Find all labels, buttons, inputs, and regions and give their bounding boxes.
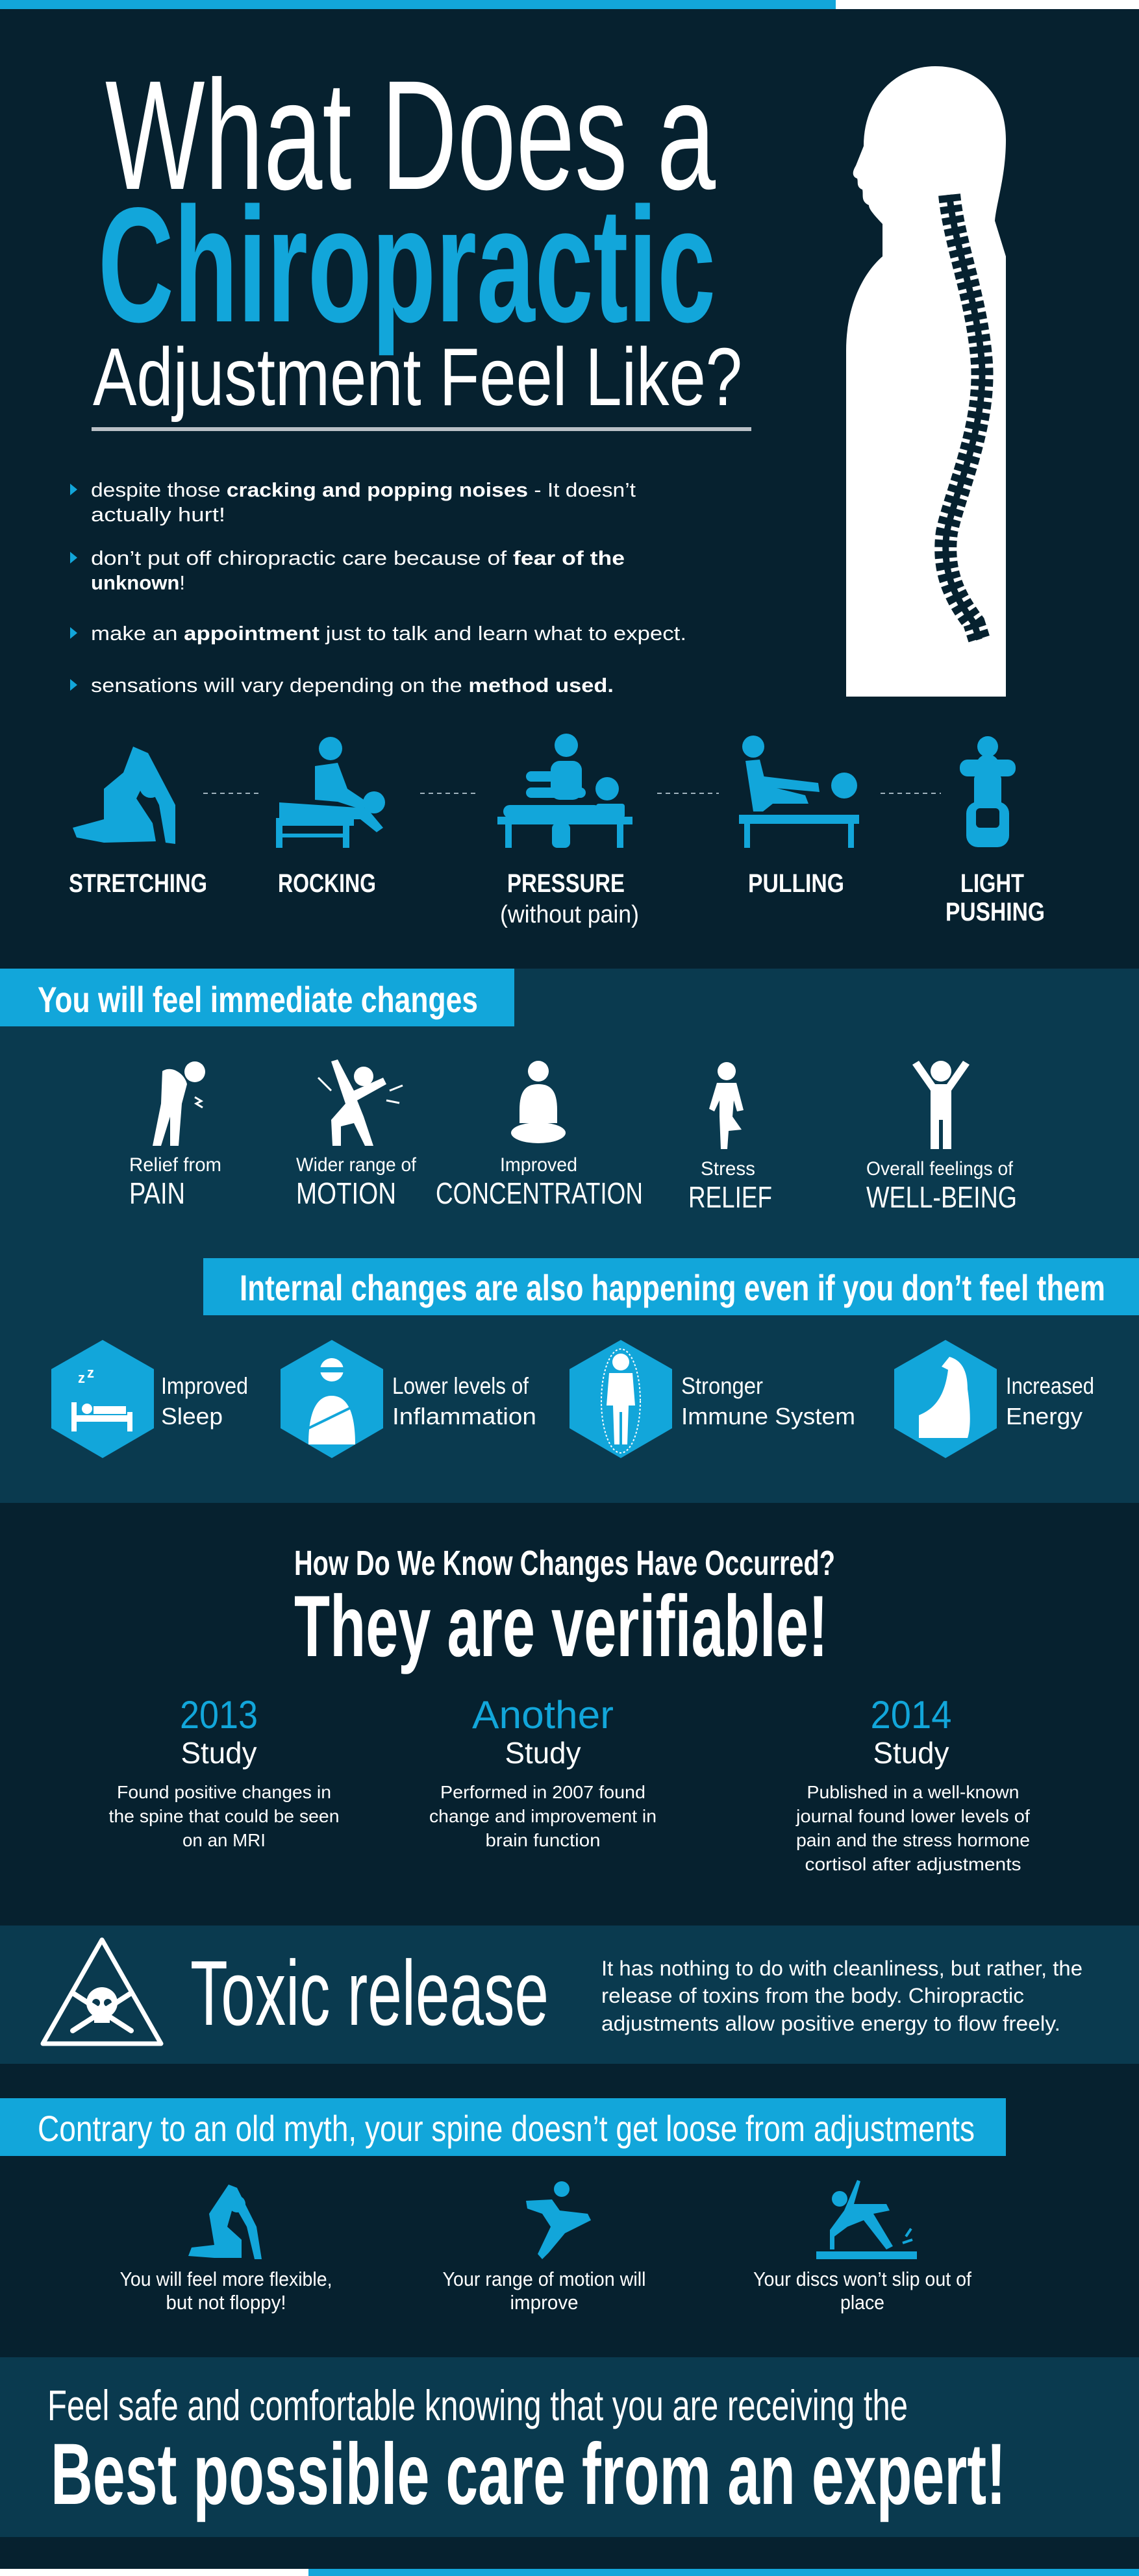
bullet list: despite those cracking and popping noises - It doesn’t — [91, 478, 636, 501]
hexagon: inflammation: Lower levels of — [392, 1372, 529, 1399]
myth captions: place — [840, 2291, 884, 2314]
icon: warning skull — [43, 1940, 161, 2044]
title: Chiropractic — [98, 174, 716, 356]
banner: myth — [0, 2098, 1006, 2156]
study: 2014: Published in a well-known — [807, 1782, 1020, 1802]
hexagon: energy: Energy — [1006, 1403, 1083, 1430]
immediate change labels: RELIEF — [688, 1180, 772, 1214]
icon: pain — [153, 1061, 205, 1146]
text block: toxic release: It has nothing to do with cleanliness, but rather, the — [601, 1957, 1083, 1980]
myth captions — [119, 2268, 971, 2314]
bullet list: make an appointment just to talk and learn what to expect. — [91, 622, 686, 645]
hexagon: energy — [894, 1340, 1094, 1458]
study: 2014 — [795, 1693, 1030, 1874]
techniques row: (without pain) — [500, 901, 639, 928]
technique labels: STRETCHING — [69, 869, 207, 898]
icon: concentration — [511, 1061, 566, 1143]
immediate change labels: Wider range of — [296, 1154, 417, 1176]
dashed connectors — [203, 793, 941, 794]
icon: slipping — [816, 2180, 917, 2259]
hexagon: inflammation: Inflammation — [392, 1403, 536, 1430]
study: 2013: 2013 — [180, 1693, 258, 1737]
immediate change labels: WELL-BEING — [866, 1180, 1017, 1214]
hexagon: inflammation — [281, 1340, 536, 1458]
myth captions: You will feel more flexible, — [119, 2268, 332, 2290]
title — [93, 48, 742, 423]
icon: well-being — [912, 1061, 970, 1149]
hexagon: sleep: Improved — [161, 1372, 248, 1399]
study: 2013: on an MRI — [182, 1830, 266, 1850]
bullet list: actually hurt! — [91, 503, 225, 526]
panel: verifiable studies — [109, 1544, 1030, 1874]
heading: How Do We Know Changes Have Occurred? — [294, 1544, 835, 1583]
icon: stress relief — [709, 1062, 744, 1149]
text block: toxic release: release of toxins from the body. Chiropractic — [601, 1984, 1024, 2007]
technique labels — [69, 869, 1045, 926]
banner: internal changes — [203, 1258, 1139, 1315]
icon: stretching — [73, 747, 175, 844]
panel: toxic release: Toxic release — [190, 1942, 549, 2045]
icon: motion — [318, 1059, 403, 1146]
technique labels: PRESSURE — [507, 869, 625, 898]
immediate change labels: Improved — [500, 1154, 577, 1176]
immediate change labels: CONCENTRATION — [436, 1176, 643, 1210]
technique labels: PULLING — [748, 869, 844, 898]
myth captions: improve — [510, 2291, 578, 2314]
study: another: change and improvement in — [429, 1806, 657, 1826]
bullet list: sensations will vary depending on the method used. — [91, 674, 614, 697]
study: another: Study — [505, 1736, 581, 1770]
banner: immediate changes: You will feel immediate changes — [38, 979, 478, 1020]
hexagon: sleep: z — [78, 1370, 85, 1386]
icon: flexible — [188, 2185, 262, 2259]
hexagon: energy: Increased — [1006, 1372, 1094, 1399]
panel: closing statement — [0, 2357, 1139, 2537]
title: Adjustment Feel Like? — [93, 331, 742, 423]
icon: human silhouette with spine — [846, 66, 1006, 697]
myth captions: Your range of motion will — [443, 2268, 645, 2290]
study: another: brain function — [486, 1830, 600, 1850]
myth captions: Your discs won’t slip out of — [753, 2268, 971, 2290]
text block: toxic release — [601, 1957, 1083, 2035]
text block: toxic release: adjustments allow positive energy to flow freely. — [601, 2012, 1060, 2035]
icon: light pushing — [960, 736, 1016, 847]
hexagon: immune system: Immune System — [681, 1403, 855, 1430]
study: 2014: Study — [873, 1736, 949, 1770]
title: What Does a — [105, 48, 716, 222]
technique labels: ROCKING — [278, 869, 376, 898]
hexagon: sleep — [51, 1340, 248, 1458]
heading: They are verifiable! — [294, 1578, 828, 1675]
icon: pulling — [739, 736, 859, 848]
immediate change labels: PAIN — [129, 1176, 185, 1210]
icon: rocking — [276, 737, 385, 848]
techniques row — [69, 734, 1045, 928]
icon: pressure — [497, 734, 632, 848]
immediate change labels: Stress — [701, 1158, 755, 1180]
study: 2013: Found positive changes in — [117, 1782, 331, 1802]
hexagon: sleep: z — [87, 1365, 94, 1381]
study: 2013 — [109, 1693, 339, 1850]
panel: immediate and internal changes — [0, 969, 1139, 1503]
icon: kicking — [526, 2181, 591, 2259]
study: 2014: 2014 — [870, 1693, 952, 1737]
bullet list: unknown! — [91, 571, 185, 594]
immediate change labels — [129, 1154, 1017, 1214]
immediate change labels: Relief from — [129, 1154, 221, 1176]
panel: toxic release — [0, 1926, 1139, 2064]
heading — [294, 1544, 835, 1675]
bullet list: don’t put off chiropractic care because of fear of the — [91, 547, 625, 569]
hexagon: sleep: Sleep — [161, 1403, 223, 1430]
study: 2013: the spine that could be seen — [109, 1806, 339, 1826]
study: another: Performed in 2007 found — [440, 1782, 645, 1802]
study: 2014: cortisol after adjustments — [805, 1854, 1021, 1874]
study: 2014: pain and the stress hormone — [796, 1830, 1030, 1850]
study: 2014: journal found lower levels of — [795, 1806, 1030, 1826]
study: another: Another — [472, 1693, 614, 1737]
banner: immediate changes — [0, 969, 514, 1026]
bullet list — [70, 478, 686, 697]
immediate change labels: MOTION — [296, 1176, 396, 1210]
myth captions: but not floppy! — [166, 2291, 286, 2314]
study: 2013: Study — [181, 1736, 257, 1770]
technique labels: LIGHT — [960, 869, 1024, 898]
immediate change labels: Overall feelings of — [866, 1158, 1014, 1180]
hexagon: immune system: Stronger — [681, 1372, 763, 1399]
study: another — [429, 1693, 657, 1850]
technique labels: PUSHING — [945, 898, 1045, 926]
hexagon: immune system — [570, 1340, 855, 1458]
